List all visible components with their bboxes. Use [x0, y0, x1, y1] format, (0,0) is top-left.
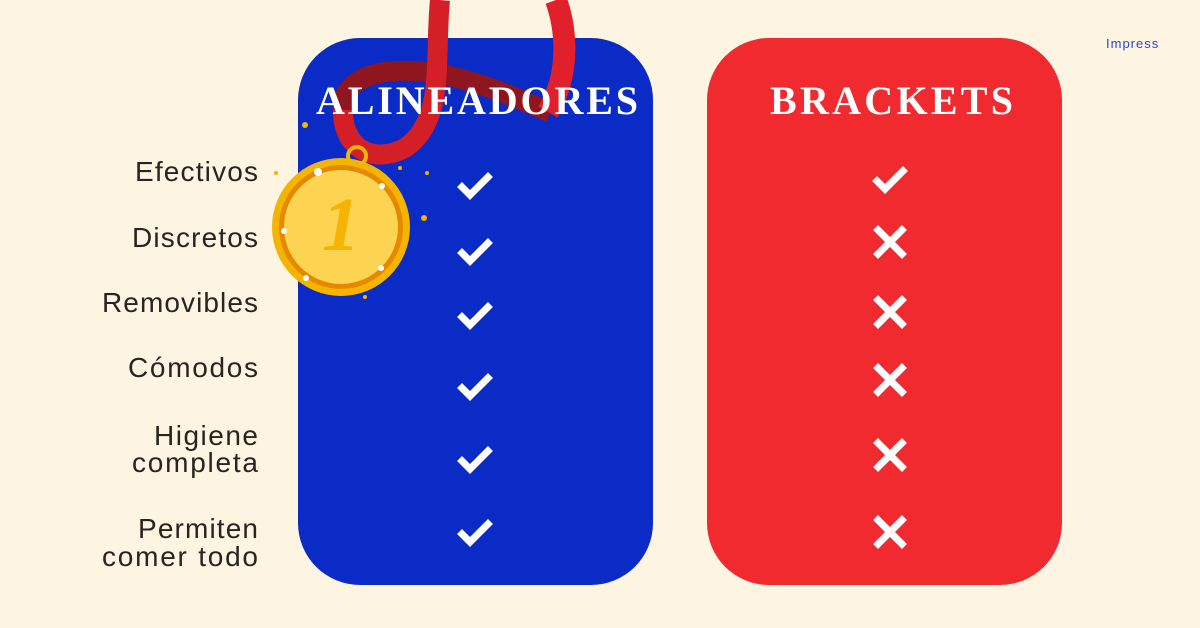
row labels: Efectivos — [135, 156, 258, 187]
icons column — [877, 171, 903, 544]
row labels: Higiene — [154, 420, 258, 451]
panel: brackets — [707, 38, 1062, 585]
checks column — [462, 177, 488, 542]
row labels: Permiten — [138, 513, 258, 544]
title: ALINEADORES: ALINEADORES — [316, 78, 638, 123]
row labels: Cómodos — [128, 352, 258, 383]
row labels: Discretos — [132, 222, 258, 253]
row labels: completa — [132, 447, 258, 478]
medal: 1 — [322, 183, 360, 267]
title: BRACKETS: BRACKETS — [770, 78, 1013, 123]
row labels — [102, 156, 258, 572]
row labels: comer todo — [102, 541, 258, 572]
panel: alineadores — [298, 0, 653, 585]
row labels: Removibles — [102, 287, 258, 318]
ribbon — [343, 0, 564, 155]
brand logo: Impress — [1106, 36, 1159, 51]
medal — [272, 122, 429, 299]
